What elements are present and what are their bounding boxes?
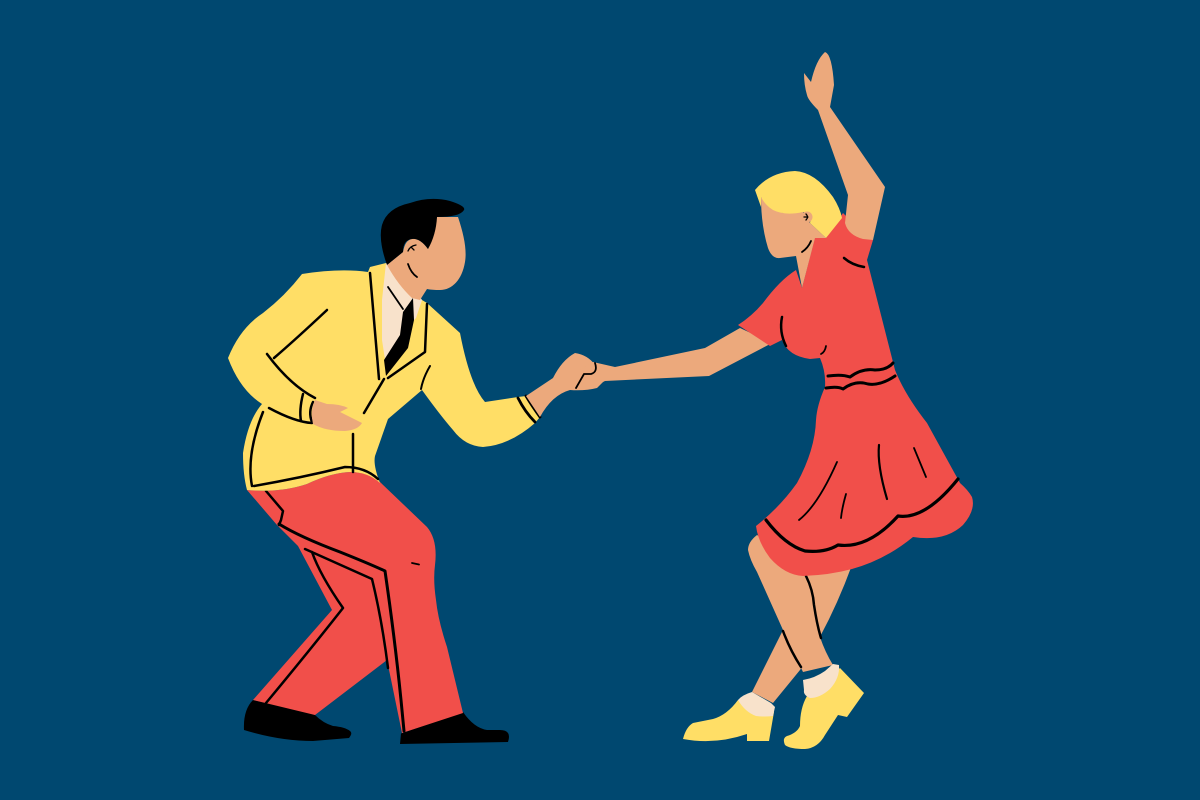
woman: ear and jaw details — [802, 212, 812, 252]
woman: hair — [755, 171, 842, 238]
man: left shoe — [244, 700, 351, 741]
woman: front leg — [748, 535, 833, 672]
woman: back leg — [752, 560, 852, 703]
man: jacket — [228, 263, 540, 491]
man: head — [381, 199, 466, 300]
man: tie — [384, 298, 414, 376]
woman: raised arm — [804, 52, 885, 240]
woman figure — [575, 52, 973, 749]
man: shirt — [382, 263, 422, 366]
man: hand on waist — [312, 400, 362, 431]
woman: extended arm — [575, 328, 772, 390]
woman: right shoe and sock — [784, 664, 864, 749]
woman: neck and face — [761, 197, 826, 288]
man: right shoe — [400, 712, 509, 744]
man: trousers — [247, 472, 463, 733]
man: wrist and fist — [526, 353, 605, 417]
woman: dress — [738, 213, 973, 576]
woman: left shoe and sock — [683, 692, 775, 741]
man figure — [228, 199, 605, 744]
